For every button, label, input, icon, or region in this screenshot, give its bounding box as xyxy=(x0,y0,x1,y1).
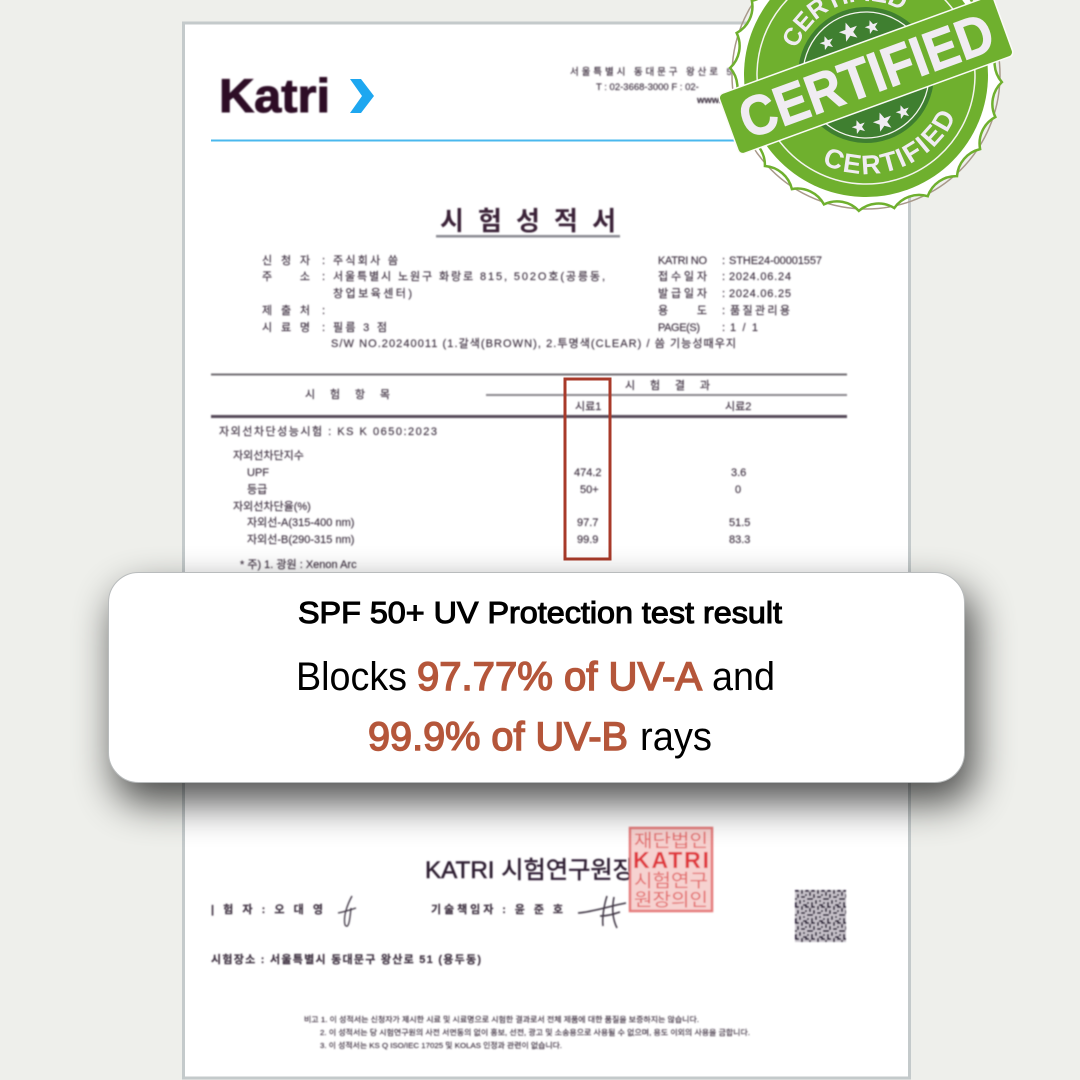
stars: top xyxy=(818,18,881,51)
callout line 1: Blocks xyxy=(296,655,407,699)
badge: certified seal xyxy=(718,0,1014,213)
applicant details: 시 료 명 xyxy=(262,321,310,334)
results table: 50+ xyxy=(580,484,599,496)
signatures line: | 험 자 : 오 대 영 xyxy=(211,902,323,916)
stars: bottom xyxy=(850,103,912,135)
report details: 용 도 xyxy=(658,304,707,317)
signatures line xyxy=(211,896,626,928)
results table: 51.5 xyxy=(729,517,750,529)
applicant details: 주 소 xyxy=(262,270,310,283)
report details: : xyxy=(722,305,725,317)
callout line 1: and xyxy=(712,655,775,699)
report details: : xyxy=(722,255,725,267)
report details: 접수일자 xyxy=(658,269,707,283)
callout line 2: 99.9% of UV-B xyxy=(368,715,628,759)
results table: 97.7 xyxy=(577,517,598,529)
applicant details: : xyxy=(322,271,325,283)
callout line 2: rays xyxy=(640,715,712,759)
results table: 3.6 xyxy=(731,467,746,479)
applicant details: 필름 3 점 xyxy=(333,321,387,334)
issuer name: KATRI 시험연구원장 xyxy=(425,857,635,884)
results table: 자외선차단지수 xyxy=(233,449,304,462)
logo: Katri: Katri xyxy=(219,69,330,122)
report details: 2024.06.24 xyxy=(729,271,791,283)
applicant details: 신 청 자 xyxy=(262,254,310,267)
results table: 자외선차단율(%) xyxy=(233,500,311,513)
panel: test certificate document xyxy=(184,23,910,1078)
report details: 품질관리용 xyxy=(730,304,790,317)
results table: 자외선차단성능시험 : KS K 0650:2023 xyxy=(219,425,437,438)
results table: 시 험 결 과 xyxy=(625,379,710,392)
report details: KATRI NO xyxy=(658,255,707,267)
results table: 99.9 xyxy=(577,534,598,546)
results table: UPF xyxy=(247,467,269,479)
report details: 1 / 1 xyxy=(730,322,758,334)
report details: : xyxy=(722,271,725,283)
curved label: bottom: CERTIFIED xyxy=(825,111,953,174)
official seal: 원장의인 xyxy=(634,890,708,910)
panel: result callout xyxy=(108,572,964,782)
results table: 83.3 xyxy=(729,534,750,546)
callout line 1: 97.77% of UV-A xyxy=(417,655,702,699)
QR code xyxy=(795,890,846,942)
header address: www. xyxy=(696,95,721,106)
results table: 시료1 xyxy=(575,401,601,413)
official seal: KATRI xyxy=(633,847,709,873)
footnotes: 2. 이 성적서는 당 시험연구원의 사전 서면동의 없이 홍보, 선전, 광고 및 소송용으로 사용될 수 없으며, 용도 이외의 사용을 금합니다. xyxy=(320,1027,750,1037)
applicant details: 서울특별시 노원구 화랑로 815, 502O호(공릉동, xyxy=(333,270,605,283)
official seal xyxy=(630,828,712,911)
results table xyxy=(211,374,847,571)
results table: 시료2 xyxy=(725,401,751,413)
applicant details: : xyxy=(322,305,325,317)
header address: T : 02-3668-3000 F : 02- xyxy=(596,82,699,93)
applicant details: 주식회사 씀 xyxy=(333,254,398,267)
results table: * 주) 1. 광원 : Xenon Arc xyxy=(240,558,357,571)
applicant details: 창업보육센터) xyxy=(333,287,412,300)
card shadow xyxy=(114,590,974,803)
applicant details: : xyxy=(322,322,325,334)
results table: 시 험 항 목 xyxy=(305,388,390,401)
header address: 서울특별시 동대문구 왕산로 51 xyxy=(570,67,740,78)
results table: 474.2 xyxy=(574,467,602,479)
report details xyxy=(658,255,822,334)
footnotes: 비고 1. 이 성적서는 신청자가 제시한 시료 및 시료명으로 시험한 결과로서 전체 제품에 대한 품질을 보증하지는 않습니다. xyxy=(304,1014,699,1024)
signatures line: 기술책임자 : 윤 준 호 xyxy=(431,902,563,916)
report details: 2024.06.25 xyxy=(729,288,791,300)
logo: Katri xyxy=(219,69,374,122)
results table: 자외선-B(290-315 nm) xyxy=(247,533,354,546)
header address xyxy=(570,67,740,106)
report details: 발급일자 xyxy=(658,286,707,300)
footnotes xyxy=(304,1014,750,1050)
applicant details xyxy=(262,254,736,350)
report details: : xyxy=(722,322,725,334)
report details: STHE24-00001557 xyxy=(729,255,822,267)
test site address: 시험장소 : 서울특별시 동대문구 왕산로 51 (용두동) xyxy=(211,952,481,966)
highlight box: sample 1 column xyxy=(565,379,610,559)
official seal: 재단법인 xyxy=(634,831,708,851)
applicant details: S/W NO.20240011 (1.갈색(BROWN), 2.투명색(CLEAR) / 씀 기능성때우지 xyxy=(331,336,736,350)
report details: : xyxy=(722,288,725,300)
applicant details: : xyxy=(322,255,325,267)
header rule xyxy=(211,140,847,142)
callout heading: SPF 50+ UV Protection test result xyxy=(298,595,782,630)
scalloped edge xyxy=(705,0,1027,236)
report details: PAGE(S) xyxy=(658,322,700,334)
document title: 시 험 성 적 서 xyxy=(440,206,616,236)
callout line 1 xyxy=(296,655,775,699)
results table: 등급 xyxy=(247,483,267,496)
applicant details: 제 출 처 xyxy=(262,304,310,317)
footnotes: 3. 이 성적서는 KS Q ISO/IEC 17025 및 KOLAS 인정과 관련이 없습니다. xyxy=(320,1040,562,1050)
results table: 0 xyxy=(735,484,741,496)
official seal: 시험연구 xyxy=(634,871,708,891)
results table: 자외선-A(315-400 nm) xyxy=(247,516,354,529)
